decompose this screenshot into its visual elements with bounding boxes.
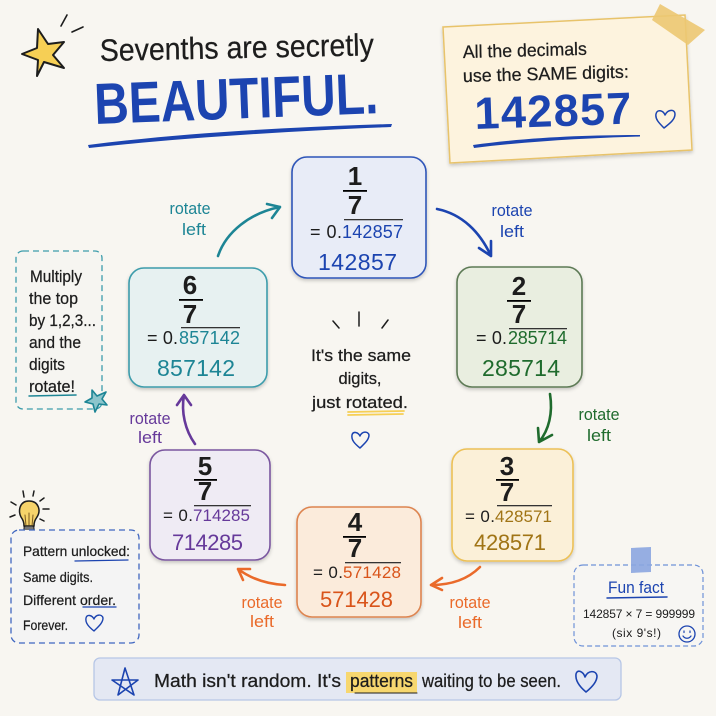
arrow: 5 to 6 <box>130 395 195 447</box>
icon: heart <box>576 671 597 692</box>
tape <box>631 547 651 573</box>
title: Sevenths are secretly <box>99 27 375 68</box>
center message: It's the same <box>311 346 411 365</box>
icon: lightbulb <box>10 491 49 534</box>
card: 1/7: 142857 <box>342 222 403 242</box>
title: BEAUTIFUL. <box>93 61 379 137</box>
callout: multiply: the top <box>29 289 78 308</box>
note: same digits: use the SAME digits: <box>463 62 629 86</box>
card: 5/7: 5 <box>198 451 212 481</box>
card: 2/7: 7 <box>512 299 526 329</box>
card: 4/7: 571428 <box>343 563 401 582</box>
callout: fun fact: (six 9's!) <box>612 626 661 640</box>
icon: heart <box>86 615 103 631</box>
banner: bottom message: Math isn't random. It's <box>154 671 341 691</box>
arrow: 3 to 4: left <box>458 613 482 632</box>
card: 2/7: 2 <box>512 271 526 301</box>
card: 3/7: 7 <box>500 477 514 507</box>
highlight: patterns: patterns <box>350 671 413 691</box>
card: 1/7: 7 <box>348 190 362 220</box>
card: 5/7: = 0. <box>163 506 193 525</box>
callout: multiply <box>16 251 107 412</box>
card: 3/7: 428571 <box>495 507 552 526</box>
arrow: 3 to 4 <box>431 567 490 632</box>
card: 4/7: 571428 <box>320 587 393 612</box>
card: 4/7: 4 <box>348 507 363 537</box>
card: 6/7: = 0. <box>147 328 178 348</box>
card: 6/7 <box>129 268 267 387</box>
tape <box>652 4 705 45</box>
card: 1/7: 142857 <box>318 249 397 275</box>
card: 2/7: 285714 <box>508 328 567 348</box>
card: 6/7: 7 <box>183 299 197 329</box>
arrow: 2 to 3 <box>538 394 620 445</box>
callout: pattern unlocked: Forever. <box>23 617 68 633</box>
note: same digits: 142857 <box>474 83 632 139</box>
card: 5/7 <box>150 450 270 560</box>
center message <box>311 312 411 448</box>
card: 2/7: = 0. <box>476 328 507 348</box>
icon: star <box>112 668 138 695</box>
card: 3/7 <box>452 449 573 561</box>
banner: bottom message <box>94 658 621 700</box>
arrow: 5 to 6: left <box>138 428 162 447</box>
arrow: 1 to 2: rotate <box>492 201 532 220</box>
callout: pattern unlocked <box>11 530 139 643</box>
arrow: 4 to 5: rotate <box>242 593 282 612</box>
arrow: 2 to 3: rotate <box>578 405 620 424</box>
callout: multiply: digits <box>29 355 65 374</box>
icon: yellow star <box>22 15 83 76</box>
callout: multiply: Multiply <box>30 267 82 286</box>
card: 3/7: 3 <box>500 451 514 481</box>
card: 6/7: 857142 <box>157 355 235 381</box>
note: same digits: All the decimals <box>463 39 587 62</box>
arrow: 6 to 1 <box>170 199 280 256</box>
callout: multiply: and the <box>29 333 81 352</box>
card: 3/7: 428571 <box>474 530 546 555</box>
card: 4/7: 7 <box>348 533 362 563</box>
callout: fun fact: 142857 × 7 = 999999 <box>583 607 695 621</box>
center message: digits, <box>338 369 382 388</box>
note: same digits <box>443 4 705 163</box>
card: 4/7: = 0. <box>313 563 343 582</box>
card: 5/7: 7 <box>198 476 212 506</box>
icon: heart <box>656 110 675 128</box>
icon: smile <box>679 626 695 642</box>
title <box>88 27 392 148</box>
arrow: 1 to 2: left <box>500 222 524 241</box>
callout: fun fact <box>574 547 703 646</box>
card: 1/7: 1 <box>348 161 362 191</box>
icon: teal star <box>85 390 107 412</box>
callout: multiply: by 1,2,3... <box>29 311 96 330</box>
card: 6/7: 6 <box>183 270 197 300</box>
card: 5/7: 714285 <box>172 530 243 555</box>
card: 2/7 <box>457 267 582 387</box>
card: 1/7 <box>292 157 426 278</box>
card: 5/7: 714285 <box>193 506 250 525</box>
arrow: 2 to 3: left <box>587 426 611 445</box>
callout: pattern unlocked: Different order. <box>23 592 116 608</box>
card: 1/7: = 0. <box>310 222 342 242</box>
callout: multiply: rotate! <box>29 377 75 396</box>
card: 4/7 <box>297 507 421 617</box>
arrow: 4 to 5 <box>238 569 285 631</box>
card: 3/7: = 0. <box>465 507 495 526</box>
card: 2/7: 285714 <box>482 355 560 381</box>
arrow: 6 to 1: rotate <box>170 199 210 218</box>
arrow: 4 to 5: left <box>250 612 274 631</box>
callout: fun fact: Fun fact <box>608 578 664 597</box>
center message: just rotated. <box>311 393 408 412</box>
card: 6/7: 857142 <box>179 328 240 348</box>
arrow: 6 to 1: left <box>182 220 206 239</box>
callout: pattern unlocked: Same digits. <box>23 569 93 585</box>
arrow: 1 to 2 <box>437 201 532 256</box>
banner: bottom message: waiting to be seen. <box>421 671 561 691</box>
icon: heart <box>352 432 369 448</box>
arrow: 3 to 4: rotate <box>450 593 490 612</box>
callout: pattern unlocked: Pattern unlocked: <box>23 543 130 559</box>
arrow: 5 to 6: rotate <box>130 409 170 428</box>
